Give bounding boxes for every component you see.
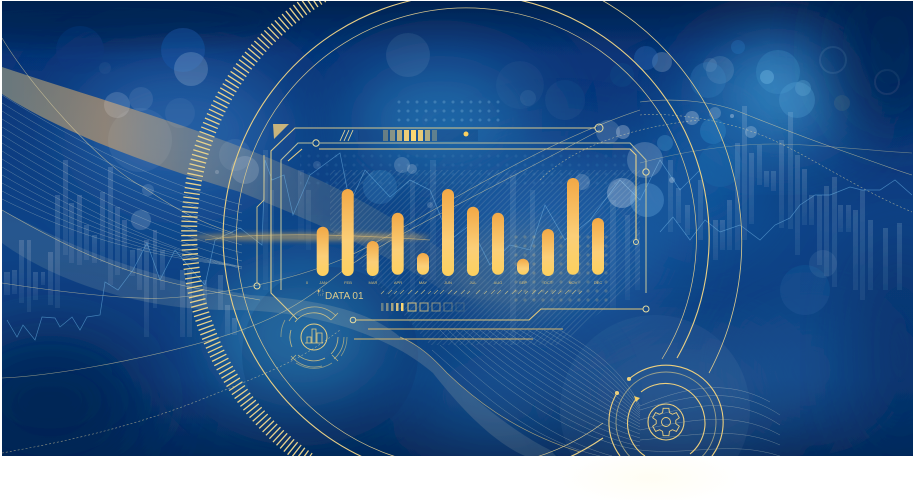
lower circuit line: [356, 309, 643, 320]
frame outer line: [271, 128, 595, 319]
background candlestick bars centre: [263, 150, 640, 345]
gear outer arcs: [609, 365, 723, 474]
month labels: JUL: [469, 280, 477, 285]
gold light streak: [190, 233, 430, 241]
gear nodes: [628, 378, 630, 380]
gear ring: [648, 404, 684, 440]
lower straight lines: [354, 329, 563, 339]
month labels: 0: [306, 280, 309, 285]
month labels: [306, 282, 602, 284]
bars: [317, 178, 604, 276]
month labels: DEC: [594, 280, 602, 285]
data label: [318, 290, 364, 299]
halftone dots and hatching: [300, 100, 640, 345]
top strip indicator: [340, 130, 478, 141]
wave mesh left: [2, 95, 242, 269]
month labels: SEP: [519, 280, 527, 285]
month labels: MAY: [419, 280, 428, 285]
frame node circles: [254, 124, 649, 323]
bokeh circles left: [56, 26, 259, 230]
frame second line: [281, 143, 646, 293]
gear inner arcs: [628, 383, 705, 456]
month labels: MAR: [369, 280, 378, 285]
background candlestick bars left: [4, 160, 237, 337]
slash row: [381, 290, 582, 294]
month labels: JUN: [444, 280, 452, 285]
wave mesh right: [432, 330, 780, 456]
frame third line: [288, 149, 636, 239]
tick ring: [189, 0, 322, 460]
corner triangle: [273, 124, 289, 139]
gear outline: [653, 408, 679, 436]
panel frame: [257, 128, 646, 339]
bokeh circles centre: [313, 33, 634, 208]
frame short left line: [257, 155, 264, 283]
icon: gear badge: [608, 364, 724, 456]
gold edge of lower wave: [400, 337, 580, 452]
month labels: NOV: [569, 280, 578, 285]
bokeh circles right: [574, 40, 899, 315]
gear middle ring: [616, 372, 716, 472]
bar chart: [306, 178, 604, 285]
month labels: JAN: [319, 280, 327, 285]
month labels: AUG: [494, 280, 502, 285]
icon: bar chart badge: [281, 307, 347, 368]
data label: DATA 01: [325, 291, 364, 302]
blue line charts: [7, 153, 912, 340]
background candlestick bars right: [668, 106, 902, 300]
progress squares: [381, 303, 464, 311]
grey lower wave band: [2, 210, 556, 456]
cream glow below the image: [560, 450, 740, 500]
month labels: OCT: [544, 280, 553, 285]
large gold arcs: [223, 0, 742, 480]
month labels: FEB: [344, 280, 352, 285]
golden wave band: [2, 67, 476, 297]
month labels: APR: [394, 280, 402, 285]
